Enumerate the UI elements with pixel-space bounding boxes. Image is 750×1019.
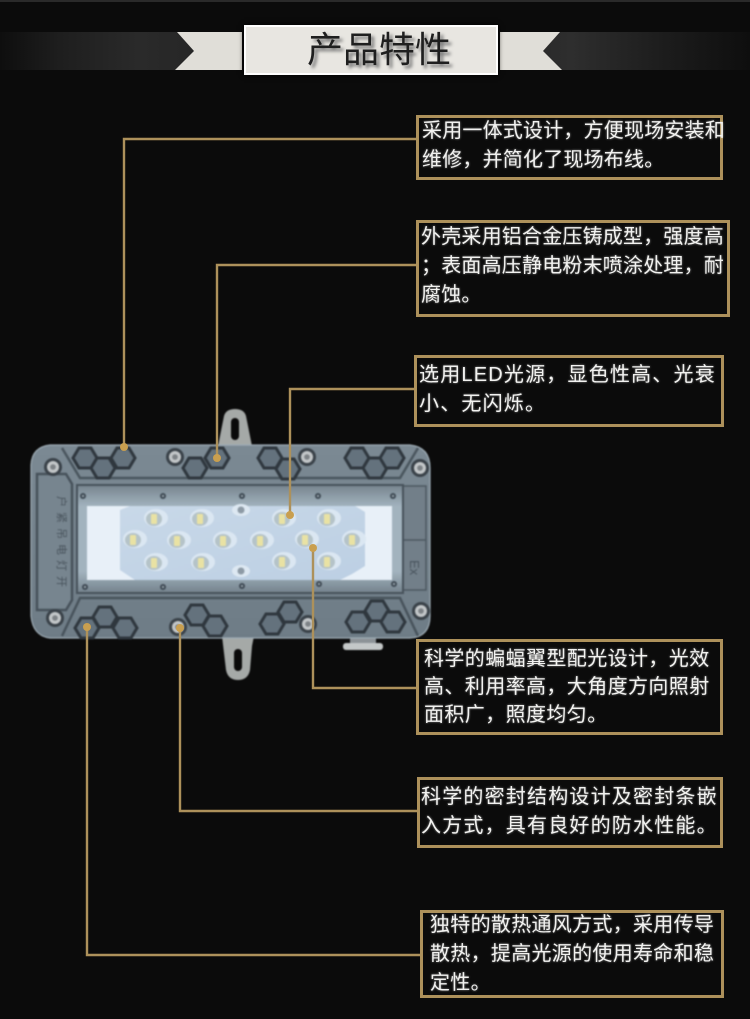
panel: integrated design: 采用一体式设计，方便现场安装和	[422, 120, 725, 142]
cable gland	[343, 634, 383, 650]
title banner	[0, 0, 750, 75]
right side panel	[404, 486, 426, 590]
leader 5	[176, 624, 417, 811]
frame screws	[80, 493, 397, 590]
honeycomb vents: bottom	[75, 601, 405, 638]
panel: batwing optics	[416, 639, 723, 735]
title plate	[244, 25, 498, 75]
panel: integrated design	[416, 115, 723, 180]
panel: aluminium housing: 腐蚀。	[421, 284, 482, 306]
honeycomb vents: top	[73, 448, 404, 479]
panel: integrated design: 维修，并简化了现场布线。	[422, 149, 664, 171]
panel: aluminium housing: 外壳采用铝合金压铸成型，强度高	[421, 226, 724, 248]
panel: aluminium housing: ；表面高压静电粉末喷涂处理，耐	[421, 255, 724, 277]
window frame	[77, 485, 403, 593]
leader 3	[286, 389, 414, 519]
lamp photo	[29, 408, 432, 681]
LED modules	[123, 504, 366, 577]
panel: heat dissipation: 独特的散热通风方式，采用传导	[430, 914, 714, 936]
panel: LED source: 小、无闪烁。	[419, 393, 546, 415]
rim recess	[62, 448, 418, 636]
panel: sealing	[417, 777, 723, 848]
panel: batwing optics: 高、利用率高，大角度方向照射	[424, 676, 710, 698]
leader 1	[120, 139, 416, 451]
panel: heat dissipation	[420, 910, 724, 998]
mounting bracket: top	[218, 409, 252, 446]
ribbon tails	[175, 32, 562, 70]
bright window	[87, 506, 392, 580]
panel: sealing: 入方式，具有良好的防水性能。	[421, 815, 718, 837]
panel: LED source	[414, 355, 724, 427]
title text: 产品特性	[307, 29, 451, 70]
leader 4	[309, 544, 416, 688]
left side panel	[37, 474, 72, 610]
panel: aluminium housing	[416, 220, 730, 317]
panel: LED source: 选用LED光源，显色性高、光衰	[419, 364, 716, 386]
panel: batwing optics: 面积广，照度均匀。	[424, 704, 608, 726]
body screws	[44, 448, 430, 636]
panel: sealing: 科学的密封结构设计及密封条嵌	[421, 786, 718, 808]
panel: heat dissipation: 散热，提高光源的使用寿命和稳	[430, 943, 714, 965]
panel: heat dissipation: 定性。	[430, 972, 491, 994]
side panel engraving: 户紧吊电灯开	[54, 496, 70, 592]
lamp body	[31, 445, 430, 638]
leader 6	[83, 623, 420, 955]
leader 2	[213, 265, 416, 462]
LED plate	[120, 506, 365, 580]
panel: batwing optics: 科学的蝙蝠翼型配光设计，光效	[424, 648, 710, 670]
mounting bracket: bottom	[222, 636, 254, 680]
Ex mark: Ex	[407, 560, 422, 576]
